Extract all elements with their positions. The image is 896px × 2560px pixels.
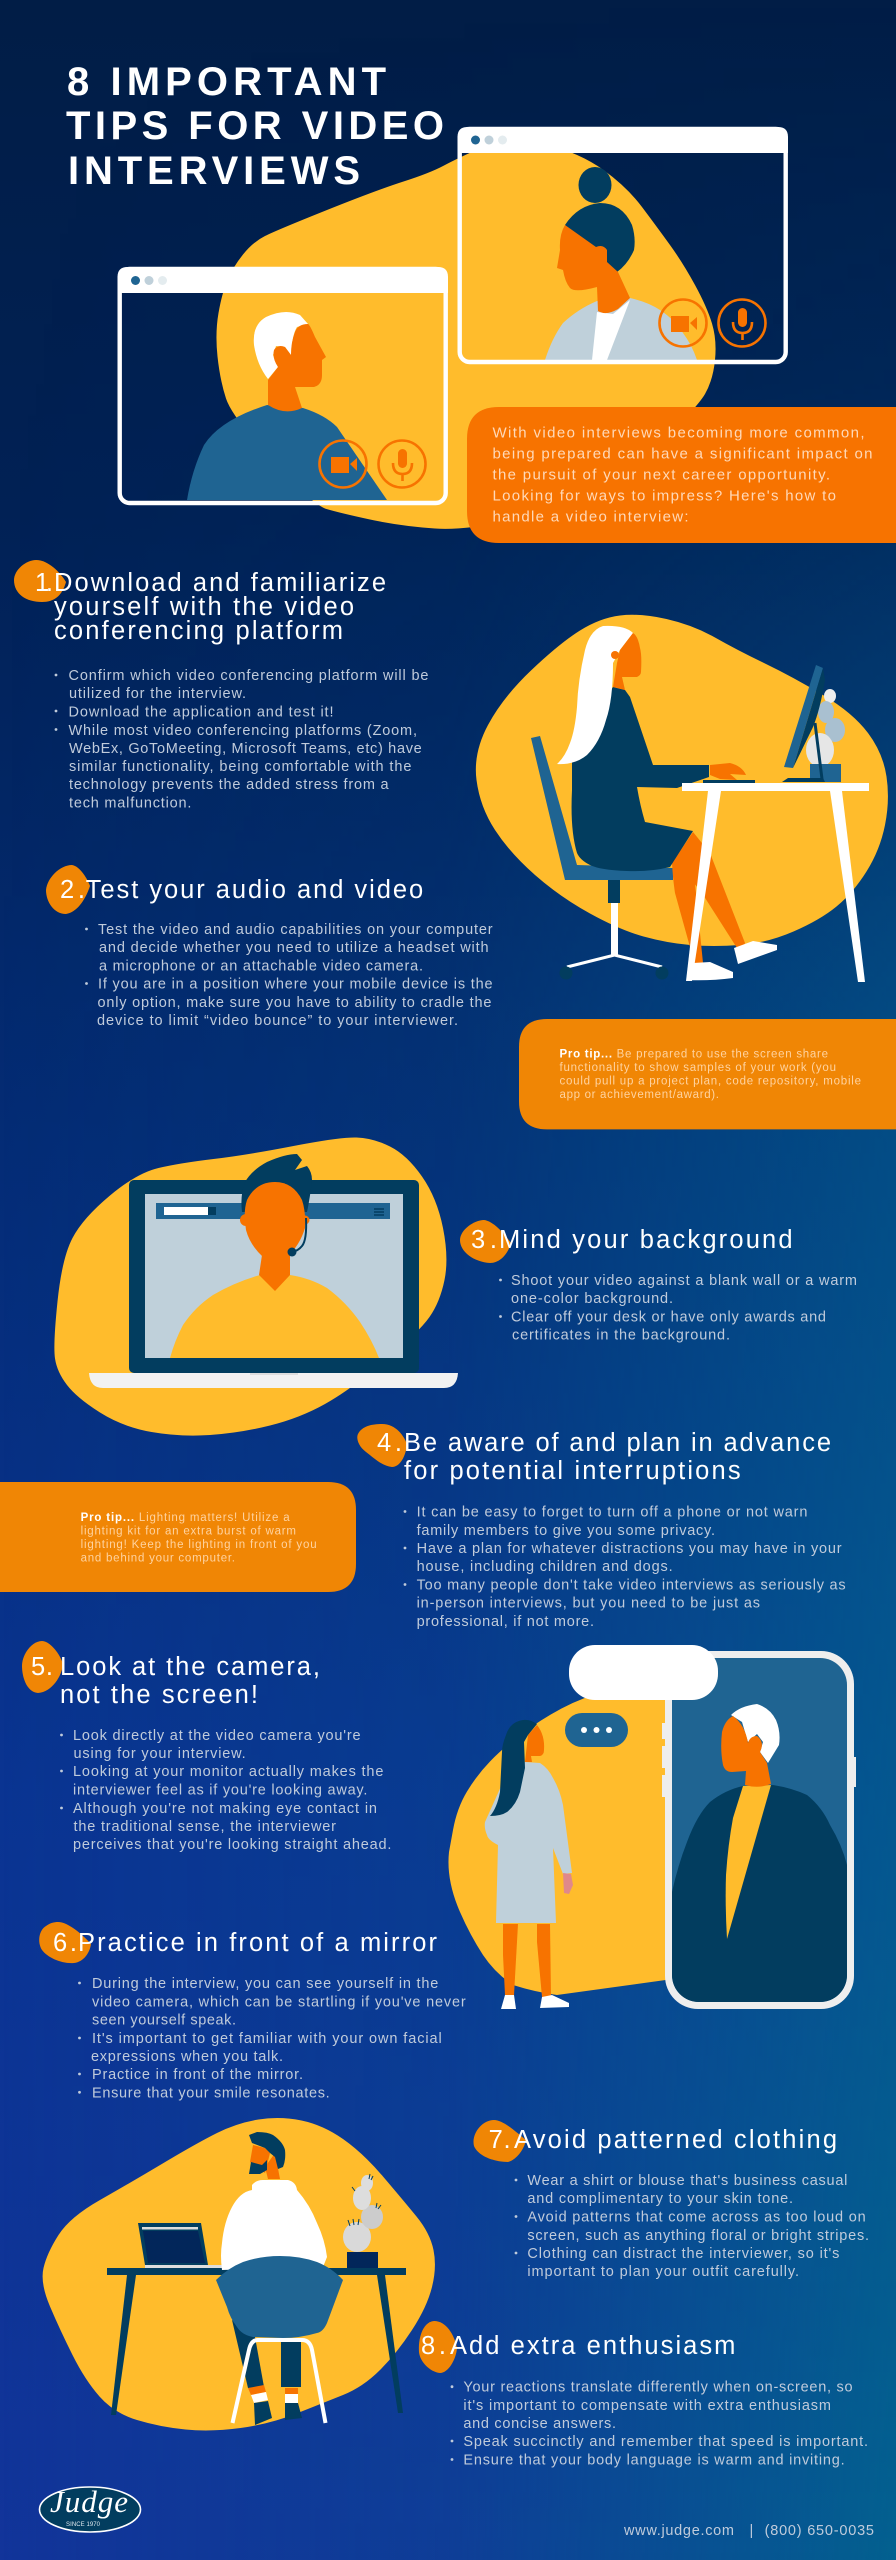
- bullet list 3: one-color background.: [511, 1291, 673, 1307]
- panel: tip 4: [357, 1424, 846, 1630]
- heading 4: [377, 1429, 831, 1485]
- panel: intro callout: Looking for ways to impress? Here's how to: [492, 488, 836, 504]
- chair: [216, 2256, 343, 2423]
- heading 2: 2.: [60, 876, 85, 904]
- hair: [557, 626, 633, 764]
- bullet list 1: While most video conferencing platforms (Zoom,: [68, 723, 417, 739]
- bullet list 5: [60, 1728, 391, 1853]
- footer contact: |: [750, 2523, 753, 2539]
- panel: tip 3: [460, 1220, 857, 1344]
- bullet list 5: the traditional sense, the interviewer: [74, 1819, 336, 1835]
- bullet list 8: [451, 2380, 868, 2468]
- bullet list 2: [85, 922, 493, 1029]
- heading 7: 7.: [489, 2126, 511, 2154]
- number badge 7: [474, 2120, 526, 2162]
- hero illustration: video call windows: [118, 127, 788, 529]
- title: 8 IMPORTANT: [67, 60, 386, 104]
- desk: [682, 783, 869, 982]
- man on phone: [672, 1704, 847, 2002]
- heading 5: Look at the camera,: [60, 1653, 320, 1681]
- number badge 1: [14, 560, 66, 602]
- bullet list 6: [78, 1976, 466, 2101]
- panel: tip 5: [22, 1641, 391, 1853]
- illustration: woman at desk: [476, 615, 888, 982]
- bullet list 5: interviewer feel as if you're looking away.: [73, 1782, 367, 1798]
- panel: pro tip lighting: and behind your computer.: [81, 1552, 235, 1564]
- heading 8: 8.: [421, 2332, 446, 2360]
- bullet list 4: Too many people don't take video interviews as seriously as: [417, 1578, 846, 1594]
- man figure: [221, 2132, 327, 2425]
- bullet list 7: Avoid patterns that come across as too loud on: [527, 2210, 866, 2226]
- bullet list 3: [499, 1273, 857, 1344]
- panel: tip 7: [474, 2120, 869, 2280]
- bullet list 8: Ensure that your body language is warm and inviting.: [463, 2452, 845, 2468]
- bullet list 1: Download the application and test it!: [68, 704, 334, 720]
- bullet list 8: it's important to compensate with extra enthusiasm: [463, 2398, 831, 2414]
- icon: microphone right window: [718, 300, 766, 346]
- bullet list 6: expressions when you talk.: [91, 2049, 283, 2065]
- heading 1: 1.: [35, 569, 53, 597]
- laptop base: [89, 1373, 458, 1388]
- hand: [710, 763, 746, 780]
- heading 4: for potential interruptions: [404, 1457, 741, 1485]
- heading 4: 4.: [377, 1429, 402, 1457]
- heading 1: conferencing platform: [54, 617, 343, 645]
- panel: intro callout: handle a video interview:: [492, 508, 688, 526]
- bullet list 7: Wear a shirt or blouse that's business casual: [527, 2173, 847, 2189]
- bullet list 1: similar functionality, being comfortable with the: [69, 759, 411, 775]
- heading 6: 6.: [53, 1929, 77, 1957]
- heading 7: Avoid patterned clothing: [514, 2126, 837, 2154]
- window frame left: [118, 267, 448, 503]
- illustration: man on laptop: [54, 1137, 458, 1436]
- bullet list 2: only option, make sure you have to ability to cradle the: [98, 995, 491, 1011]
- shoes: [687, 941, 777, 980]
- cactus plant: [343, 2174, 383, 2268]
- number badge 5: [22, 1641, 63, 1693]
- number badge 3: [460, 1220, 511, 1263]
- bullet list 8: Your reactions translate differently when on-screen, so: [463, 2380, 853, 2396]
- standing woman: [485, 1720, 573, 2009]
- yellow blob: [54, 1137, 446, 1436]
- bullet list 5: Look directly at the video camera you're: [73, 1728, 361, 1744]
- footer contact: [623, 2523, 874, 2539]
- heading 5: not the screen!: [60, 1681, 258, 1709]
- heading 4: Be aware of and plan in advance: [404, 1429, 831, 1457]
- desk: [107, 2268, 406, 2415]
- speech bubble typing: [565, 1713, 628, 1747]
- heading 1: yourself with the video: [54, 593, 354, 621]
- bullet list 1: WebEx, GoToMeeting, Microsoft Teams, etc) have: [69, 741, 422, 757]
- face: [613, 633, 641, 690]
- bullet list 8: and concise answers.: [463, 2416, 616, 2432]
- bullet list 5: using for your interview.: [74, 1746, 246, 1762]
- footer contact: (800) 650-0035: [765, 2523, 874, 2539]
- bullet list 7: Clothing can distract the interviewer, so it's: [527, 2246, 839, 2262]
- bullet list 3: Shoot your video against a blank wall or a warm: [511, 1273, 857, 1289]
- panel: intro callout: being prepared can have a significant impact on: [492, 446, 872, 462]
- panel: pro tip screen share: Pro tip... Be prepared to use the screen share: [560, 1048, 828, 1060]
- hero yellow blob: [216, 140, 716, 529]
- number badge 8: [419, 2321, 457, 2373]
- heading 6: Practice in front of a mirror: [78, 1929, 437, 1957]
- footer contact: www.judge.com: [623, 2523, 734, 2539]
- title: INTERVIEWS: [68, 149, 360, 193]
- panel: pro tip screen share: app or achievement/award).: [560, 1089, 719, 1101]
- bullet list 1: [55, 668, 428, 812]
- bullet list 5: Looking at your monitor actually makes the: [73, 1764, 383, 1780]
- panel: pro tip screen share: [519, 1019, 896, 1129]
- bullet list 1: Confirm which video conferencing platform will be: [68, 668, 428, 684]
- bullet list 7: screen, such as anything floral or bright stripes.: [527, 2228, 869, 2244]
- bullet list 4: house, including children and dogs.: [417, 1559, 673, 1575]
- number badge 2: [46, 865, 90, 914]
- bullet list 2: Test the video and audio capabilities on your computer: [98, 922, 493, 938]
- woman on video call: [545, 167, 697, 360]
- legs: [672, 832, 745, 963]
- bullet list 7: important to plan your outfit carefully.: [527, 2264, 799, 2280]
- keyboard: [703, 780, 755, 783]
- bullet list 4: Have a plan for whatever distractions you may have in your: [417, 1541, 842, 1557]
- bullet list 6: Practice in front of the mirror.: [92, 2067, 303, 2083]
- laptop screen: [129, 1180, 419, 1373]
- bullet list 7: [515, 2173, 869, 2280]
- icon: camera left window: [320, 440, 366, 488]
- bullet list 4: family members to give you some privacy.: [417, 1523, 715, 1539]
- heading 3: Mind your background: [499, 1226, 793, 1254]
- heading 3: 3.: [471, 1226, 497, 1254]
- logo: Judge since 1970: SINCE 1970: [66, 2522, 101, 2528]
- number badge 4: [357, 1424, 407, 1467]
- bullet list 6: video camera, which can be startling if you've never: [92, 1994, 466, 2010]
- heading 2: Test your audio and video: [86, 876, 423, 904]
- bullet list 2: and decide whether you need to utilize a headset with: [99, 940, 489, 956]
- bullet list 6: seen yourself speak.: [92, 2012, 236, 2028]
- body: [572, 687, 709, 871]
- panel: tip 1: [14, 560, 428, 812]
- icon: microphone left window: [378, 440, 426, 488]
- bullet list 2: device to limit “video bounce” to your interviewer.: [97, 1013, 458, 1029]
- panel: tip 2: [46, 865, 493, 1029]
- speech bubble white: [569, 1645, 718, 1700]
- phone: [662, 1651, 856, 2009]
- bullet list 4: in-person interviews, but you need to be just as: [417, 1596, 760, 1612]
- illustration: woman and phone: [448, 1645, 856, 2009]
- person on screen: [170, 1154, 379, 1358]
- bullet list 4: It can be easy to forget to turn off a phone or not warn: [417, 1505, 807, 1521]
- panel: pro tip screen share: could pull up a project plan, code repository, mobile: [560, 1076, 861, 1088]
- plant: [806, 689, 845, 782]
- yellow blob: [476, 615, 888, 946]
- heading 1: [35, 569, 386, 645]
- panel: pro tip screen share: functionality to show samples of your work (you: [560, 1062, 836, 1074]
- panel: intro callout: the pursuit of your next career opportunity.: [492, 466, 830, 484]
- illustration: man at desk from behind: [43, 2118, 435, 2430]
- number badge 6: [39, 1922, 91, 1963]
- bullet list 2: a microphone or an attachable video camera.: [99, 958, 423, 974]
- yellow blob: [43, 2118, 435, 2430]
- monitor: [782, 665, 825, 782]
- yellow blob: [448, 1690, 680, 1995]
- icon: camera right window: [660, 300, 706, 346]
- bullet list 8: Speak succinctly and remember that speed is important.: [463, 2434, 868, 2450]
- logo: Judge since 1970: [40, 2484, 140, 2532]
- bullet list 2: If you are in a position where your mobile device is the: [98, 976, 493, 992]
- bullet list 6: It's important to get familiar with your own facial: [92, 2031, 442, 2047]
- heading 1: Download and familiarize: [54, 569, 386, 597]
- panel: pro tip lighting: Pro tip... Lighting matters! Utilize a: [81, 1512, 290, 1524]
- bullet list 3: Clear off your desk or have only awards and: [511, 1309, 826, 1325]
- heading 5: 5.: [31, 1653, 53, 1681]
- bullet list 1: tech malfunction.: [69, 796, 191, 812]
- bullet list 5: perceives that you're looking straight ahead.: [73, 1837, 391, 1853]
- bullet list 1: technology prevents the added stress from a: [69, 777, 390, 793]
- chair: [531, 736, 673, 980]
- bullet list 3: certificates in the background.: [512, 1328, 730, 1344]
- logo: Judge since 1970: Judge: [50, 2484, 128, 2519]
- panel: pro tip lighting: lighting kit for an extra burst of warm: [81, 1526, 296, 1538]
- bullet list 1: utilized for the interview.: [69, 686, 246, 702]
- title: [66, 60, 444, 193]
- bullet list 5: Although you're not making eye contact in: [73, 1801, 377, 1817]
- bullet list 6: Ensure that your smile resonates.: [92, 2085, 330, 2101]
- panel: pro tip lighting: lighting! Keep the lighting in front of you: [81, 1539, 317, 1551]
- panel: pro tip lighting: [0, 1482, 356, 1592]
- bullet list 4: professional, if not more.: [417, 1614, 594, 1630]
- bullet list 7: and complimentary to your skin tone.: [527, 2191, 793, 2207]
- panel: tip 8: [419, 2321, 868, 2468]
- title: TIPS FOR VIDEO: [66, 104, 444, 148]
- desk laptop: [138, 2223, 225, 2268]
- panel: intro callout: [467, 407, 896, 543]
- heading 5: [31, 1653, 320, 1709]
- heading 8: Add extra enthusiasm: [450, 2332, 735, 2360]
- bullet list 6: During the interview, you can see yourself in the: [92, 1976, 438, 1992]
- panel: intro callout: With video interviews becoming more common,: [492, 424, 864, 442]
- man on video call: [187, 312, 387, 500]
- window frame right: [458, 127, 788, 362]
- panel: tip 6: [39, 1922, 466, 2101]
- bullet list 4: [404, 1505, 846, 1630]
